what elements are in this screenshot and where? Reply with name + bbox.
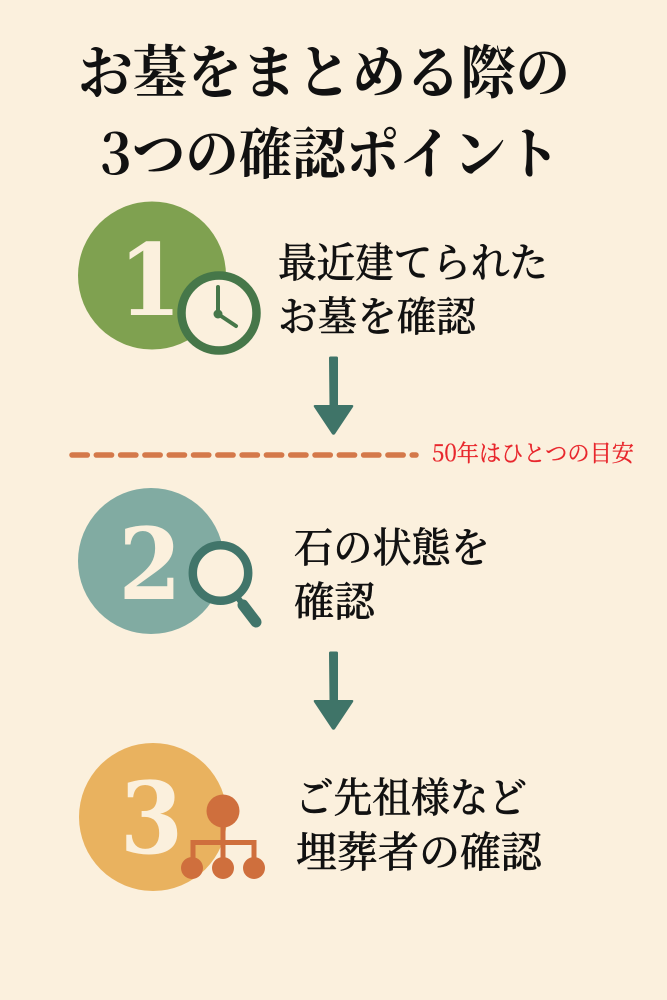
icon: clock [182, 276, 256, 350]
arrow 1 [314, 356, 353, 435]
numeral 3: 3 [120, 761, 183, 877]
numeral 1: 1 [118, 223, 182, 339]
step 2 text: 石の状態を [294, 515, 490, 574]
note: 50-year guide: 50年はひとつの目安 [432, 435, 634, 468]
title: 3つの確認ポイント [100, 111, 560, 191]
step 1 [78, 202, 548, 350]
step 2 [78, 488, 490, 634]
title: お墓をまとめる際の [78, 26, 570, 110]
title [78, 26, 570, 191]
number circle 2 [78, 488, 224, 634]
number circle 1 [78, 202, 226, 350]
step 1 text: お墓を確認 [278, 284, 478, 343]
step 2 text: 確認 [294, 569, 377, 628]
step 3 text [295, 765, 544, 880]
icon: family tree [181, 794, 265, 879]
step 1 text [278, 230, 548, 343]
step 3 text: 埋葬者の確認 [296, 820, 544, 880]
dashed line: 50-year marker [72, 452, 416, 458]
step 3 text: ご先祖様など [295, 765, 527, 824]
step 1 text: 最近建てられた [278, 230, 548, 289]
step 3 [79, 743, 544, 891]
numeral 2: 2 [118, 507, 182, 623]
step 2 text [294, 515, 490, 628]
icon: magnifying glass [193, 545, 256, 622]
number circle 3 [79, 743, 227, 891]
arrow 2 [314, 652, 353, 730]
